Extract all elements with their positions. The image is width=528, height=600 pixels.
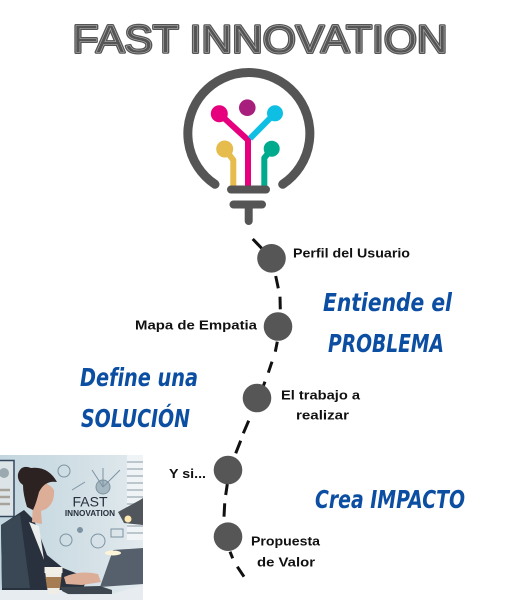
step: Perfil del Usuario: Perfil del Usuario — [293, 246, 410, 260]
photo text: INNOVATION — [65, 509, 115, 518]
shirt — [29, 522, 44, 560]
callout: Entiende el PROBLEMA: Entiende el — [323, 288, 452, 317]
photo text — [65, 497, 114, 516]
circuit: green — [264, 144, 277, 188]
callout: Entiende el PROBLEMA: PROBLEMA — [328, 329, 444, 358]
callout: Define una SOLUCIÓN: SOLUCIÓN — [81, 403, 190, 433]
circuit: cyan — [250, 108, 280, 138]
blazer highlight — [1, 514, 30, 588]
step: Y si...: Y si... — [169, 466, 206, 481]
step: Perfil del Usuario — [257, 244, 410, 273]
step: Propuesta de Valor: Propuesta — [251, 534, 321, 548]
laptop — [60, 548, 143, 594]
lamp glow — [124, 516, 132, 522]
icon: light bulb — [188, 73, 310, 221]
callout: Crea IMPACTO: Crea IMPACTO — [315, 485, 465, 514]
callout: Define una SOLUCIÓN — [80, 363, 198, 433]
title: FAST INNOVATION — [72, 18, 448, 62]
step: Mapa de Empatia — [135, 312, 292, 341]
step: Mapa de Empatia: Mapa de Empatia — [135, 318, 258, 332]
face and neck — [32, 483, 54, 524]
hand — [64, 573, 101, 585]
callout: Define una SOLUCIÓN: Define una — [80, 363, 198, 392]
wall poster — [0, 460, 14, 516]
blazer — [1, 510, 88, 590]
step: El trabajo a realizar: realizar — [296, 408, 349, 422]
callout: Entiende el PROBLEMA — [323, 288, 452, 358]
window blinds — [127, 455, 143, 540]
bulb outline — [188, 73, 310, 184]
hair — [18, 467, 57, 510]
step: El trabajo a realizar — [243, 384, 361, 422]
step: Y si... — [169, 456, 242, 484]
step: El trabajo a realizar: El trabajo a — [281, 388, 361, 402]
step: Propuesta de Valor: de Valor — [257, 554, 315, 570]
title: FAST INNOVATION — [72, 18, 448, 62]
circuit: purple node — [239, 99, 256, 116]
desk — [0, 590, 128, 600]
step: Propuesta de Valor — [214, 522, 321, 570]
wall — [0, 455, 143, 600]
photo text: FAST — [72, 494, 108, 510]
timeline dashed path — [224, 239, 280, 577]
desk lamp — [118, 498, 143, 525]
diagram sketches — [58, 465, 123, 548]
circuit: yellow — [219, 144, 233, 188]
coffee cup — [44, 567, 62, 594]
photo: woman at a laptop — [0, 455, 143, 600]
bulb base — [231, 190, 266, 221]
circuit: magenta — [214, 108, 248, 188]
